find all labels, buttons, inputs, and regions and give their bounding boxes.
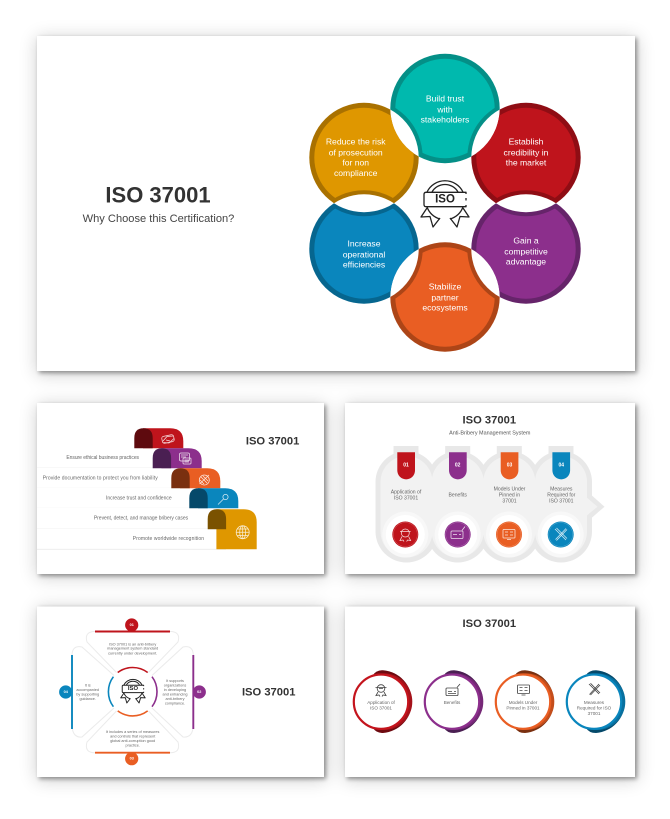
icon: document <box>180 453 191 464</box>
icon: ISO badge small: ISO <box>128 686 138 692</box>
row: increase trust: Increase trust and confidence <box>106 495 172 501</box>
petal: reduce the risk of prosecution: Reduce the risk <box>326 137 386 147</box>
step: blue <box>189 488 238 508</box>
tile: left: It is <box>85 683 91 687</box>
panel: four circles slide <box>345 606 635 777</box>
petal: reduce the risk of prosecution <box>309 103 419 212</box>
step 04: measures: ISO 37001 <box>549 499 574 505</box>
tile: right: anti-bribery <box>166 697 185 701</box>
icon: globe <box>236 526 249 539</box>
petal: increase operational efficiencies: efficiencies <box>343 259 385 269</box>
petal: build trust with stakeholders <box>390 54 500 163</box>
row: provide documentation <box>37 468 172 488</box>
petal: establish credibility in the market: credibility in <box>504 148 549 158</box>
petal: increase operational efficiencies: operational <box>343 249 385 259</box>
badge 03 <box>125 752 138 765</box>
row: increase trust <box>37 488 190 508</box>
heading: ISO 37001 <box>463 618 516 630</box>
step 04: measures: 04 <box>559 463 564 469</box>
step 04: measures: Required for <box>547 492 576 498</box>
badge 04 <box>59 685 72 699</box>
circle: models <box>496 670 554 733</box>
heading: ISO 37001 <box>242 687 295 699</box>
row: promote recognition: Promote worldwide recognition <box>133 536 204 542</box>
petal: stabilize partner ecosystems <box>390 242 500 352</box>
circle: measures: Required for ISO <box>577 706 612 710</box>
petal: build trust with stakeholders: Build trust <box>426 93 465 103</box>
badge 02: 02 <box>197 690 201 694</box>
icon: magnifier <box>218 494 228 504</box>
step 04: measures: Measures <box>550 486 573 492</box>
petal: establish credibility in the market <box>471 103 581 212</box>
petal: reduce the risk of prosecution: of prosecution <box>329 147 383 157</box>
row: provide documentation: Provide documentation to protect you from liability <box>43 475 158 481</box>
petal: build trust with stakeholders: with <box>436 104 453 114</box>
step 04: measures <box>538 452 584 558</box>
tile: right: compliance. <box>165 702 185 706</box>
step 01: application: Application of <box>391 489 422 495</box>
step: red <box>134 428 183 448</box>
panel: management system slide <box>345 403 635 574</box>
tile: top: management system standard <box>107 647 158 651</box>
row: ensure ethical business practices: Ensure ethical business practices <box>66 455 140 461</box>
petal: gain a competitive advantage <box>471 194 581 304</box>
circle: benefits <box>425 670 483 733</box>
step: orange <box>171 468 220 488</box>
petal: build trust with stakeholders: stakeholders <box>421 115 469 125</box>
tile: top <box>86 632 179 672</box>
heading: ISO 37001 <box>246 436 299 448</box>
row: prevent detect manage <box>37 508 208 529</box>
step 03: models: Models Under <box>494 486 526 492</box>
panel: main slide, why choose this certification <box>37 36 635 371</box>
process background shape <box>376 446 604 562</box>
tile: left <box>72 647 114 737</box>
icon: ISO badge: ISO <box>435 194 455 206</box>
step 02: benefits <box>435 452 481 558</box>
tile: right: organizations <box>164 684 186 688</box>
tile: right: and enhancing <box>163 693 187 697</box>
panel: four-part diagram slide <box>37 606 324 777</box>
petal: establish credibility in the market: the market <box>506 158 547 168</box>
tile: bottom <box>86 711 179 753</box>
center ring arcs <box>108 668 157 716</box>
subheading: Anti-Bribery Management System <box>449 430 531 436</box>
badge 02 <box>193 685 206 699</box>
circle: measures: 37001 <box>588 711 601 716</box>
subtitle: Why Choose this Certification? <box>83 213 234 225</box>
tile: top: ISO 37001 is an anti-bribery <box>109 642 156 646</box>
petal: increase operational efficiencies <box>309 194 419 304</box>
step 03: models: 37001 <box>502 499 517 505</box>
circle: application: ISO 37001 <box>370 706 392 710</box>
circle: models: Models Under <box>509 700 538 705</box>
tile: right <box>152 647 193 737</box>
step: purple <box>153 448 202 468</box>
tile: right: in developing <box>164 688 186 692</box>
badge 03: 03 <box>130 757 134 761</box>
row: prevent detect manage: Prevent, detect, and manage bribery cases <box>94 515 189 521</box>
petal: gain a competitive advantage: Gain a <box>513 236 539 246</box>
row: promote recognition <box>37 529 226 549</box>
petal: gain a competitive advantage: competitive <box>504 247 548 257</box>
icon: ISO badge <box>421 181 469 227</box>
circle: application: Application of <box>367 700 396 705</box>
title: ISO 37001 <box>105 182 211 208</box>
step 03: models <box>486 452 532 558</box>
tile: bottom: It includes a series of measures <box>106 730 159 734</box>
step 02: benefits: 02 <box>455 463 461 469</box>
petal: reduce the risk of prosecution: compliance <box>334 168 378 178</box>
step 03: models: Pinned in <box>499 492 520 498</box>
tile: bottom: and controls that represent <box>110 735 156 739</box>
step: gold <box>208 509 257 549</box>
step 02: benefits: Benefits <box>448 493 467 499</box>
petal: stabilize partner ecosystems: Stabilize <box>429 282 461 292</box>
circle: measures: Measures <box>584 700 605 705</box>
badge 01 <box>125 618 138 632</box>
icon: trust <box>199 475 209 485</box>
petal: increase operational efficiencies: Increase <box>348 239 381 249</box>
step 01: application: ISO 37001 <box>394 496 418 502</box>
panel: stepped list slide <box>37 403 324 574</box>
icon: handshake <box>161 434 175 444</box>
petal: stabilize partner ecosystems: ecosystems <box>422 303 468 313</box>
badge 04: 04 <box>64 690 69 694</box>
tile: bottom: global anti-corruption good <box>110 739 155 743</box>
petal: gain a competitive advantage: advantage <box>506 257 546 267</box>
step 01: application: 01 <box>403 463 409 469</box>
tile: top: currently under development. <box>108 651 157 655</box>
row: ensure ethical business practices <box>37 448 153 468</box>
icon: ISO badge small <box>121 679 145 703</box>
petal: establish credibility in the market: Establish <box>509 137 544 147</box>
badge 01: 01 <box>130 623 134 627</box>
petal: stabilize partner ecosystems: partner <box>431 292 459 302</box>
step 01: application <box>382 452 428 558</box>
circle: measures <box>567 670 625 733</box>
tile: bottom: practice. <box>126 744 140 748</box>
heading: ISO 37001 <box>463 415 516 427</box>
tile: left: by supporting <box>76 693 99 697</box>
circle: models: Pinned in 37001 <box>506 706 540 710</box>
petal: reduce the risk of prosecution: for non <box>342 158 369 168</box>
tile: left: accompanied <box>76 688 99 692</box>
circle: benefits: Benefits <box>444 700 461 705</box>
circle: application <box>354 670 412 733</box>
tile: right: It supports <box>166 679 184 683</box>
tile: left: guidance. <box>79 697 96 701</box>
step 03: models: 03 <box>507 463 512 469</box>
